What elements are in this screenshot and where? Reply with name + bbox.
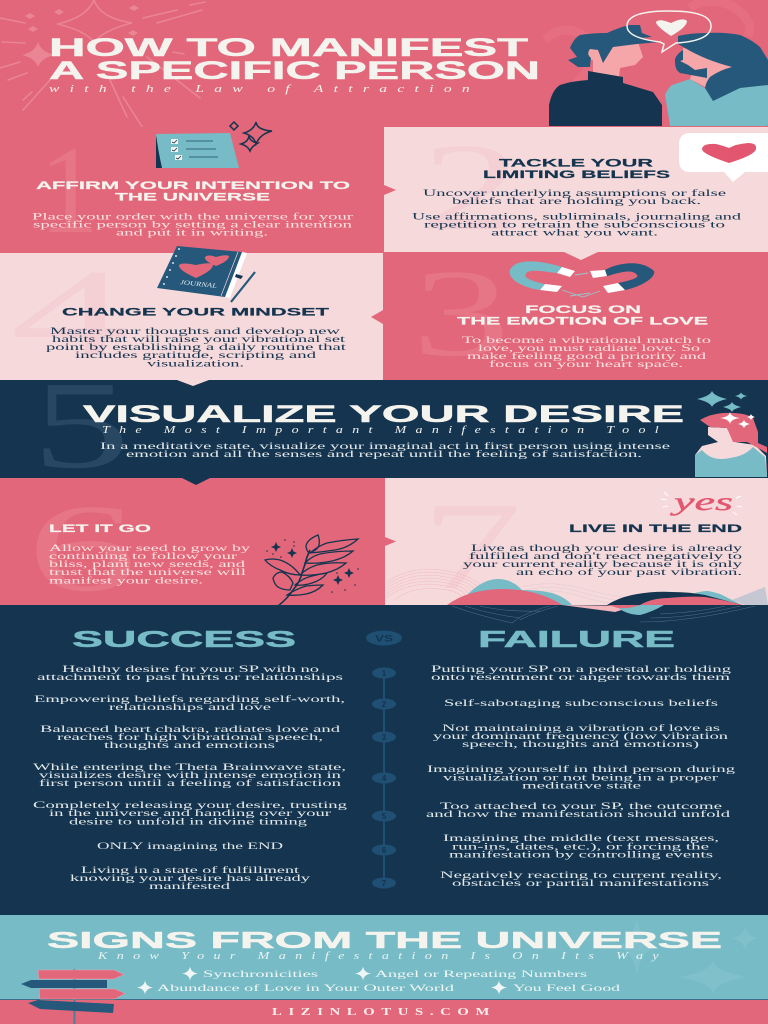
panel 2 — [384, 119, 768, 257]
success list: thoughts and emotions — [104, 740, 276, 750]
number 2: 2 — [421, 119, 521, 257]
body text — [463, 543, 743, 577]
vs badge: VS — [375, 634, 393, 644]
failure list — [426, 664, 736, 888]
timeline: 4 — [382, 774, 387, 783]
body text — [46, 326, 347, 368]
heading: SIGNS FROM THE UNIVERSE — [47, 927, 722, 953]
success list: Living in a state of fulfillment — [81, 865, 300, 875]
panel 7 — [385, 478, 768, 616]
timeline: 6 — [382, 846, 387, 855]
illustration: signpost — [21, 969, 125, 1024]
timeline: 1 — [382, 669, 387, 678]
signs list — [137, 966, 621, 994]
body text: an echo of your past vibration. — [516, 567, 742, 577]
heading: AFFIRM YOUR INTENTION TO — [36, 180, 351, 192]
body text — [32, 212, 353, 238]
icon: checklist — [156, 133, 239, 168]
success list: Healthy desire for your SP with no — [62, 664, 320, 674]
failure list: Imagining the middle (text messages, — [443, 833, 719, 843]
heading — [36, 180, 351, 204]
body text: focus on your heart space. — [489, 359, 683, 369]
heading: CHANGE YOUR MINDSET — [62, 306, 330, 318]
failure list: Not maintaining a vibration of love as — [442, 723, 721, 733]
success list: While entering the Theta Brainwave state, — [33, 762, 346, 772]
failure list: speech, thoughts and emotions) — [462, 739, 699, 749]
body text: In a meditative state, visualize your imaginal act in first person using intense — [100, 441, 670, 451]
body text: To become a vibrational match to — [462, 335, 712, 345]
number 1: 1 — [39, 122, 99, 260]
failure list: visualization or not being in a proper — [443, 772, 718, 782]
failure list: Too attached to your SP, the outcome — [440, 801, 722, 811]
number 5: 5 — [32, 357, 130, 495]
title: A SPECIFIC PERSON — [49, 57, 540, 85]
icon: sparkles — [230, 122, 272, 151]
body text: Place your order with the universe for your — [32, 212, 353, 222]
body text: visualization. — [147, 358, 244, 368]
title — [49, 34, 540, 85]
body text: Allow your seed to grow by — [49, 543, 251, 553]
heading: THE UNIVERSE — [115, 192, 270, 204]
title: HOW TO MANIFEST — [49, 34, 528, 62]
timeline: 2 — [382, 700, 387, 709]
panel 3 — [383, 245, 768, 383]
body text: beliefs that are holding you back. — [452, 196, 701, 206]
number 6: 6 — [27, 480, 137, 618]
footer — [0, 999, 768, 1024]
body text: Uncover underlying assumptions or false — [423, 188, 726, 198]
success list: desire to unfold in divine timing — [69, 816, 308, 826]
failure list: and how the manifestation should unfold — [426, 809, 731, 819]
body text: Use affirmations, subliminals, journaling and — [412, 212, 742, 222]
icon: leafy branch — [265, 535, 359, 606]
icon: magnets — [510, 261, 654, 297]
heading: LIVE IN THE END — [569, 523, 742, 535]
panel: signs from the universe — [0, 915, 768, 1000]
timeline: 5 — [382, 812, 387, 821]
heading: VISUALIZE YOUR DESIRE — [83, 401, 684, 428]
body text: point by establishing a daily routine that — [46, 342, 347, 352]
icon: yes: yes — [668, 489, 733, 516]
decorative faint stars — [618, 918, 758, 994]
body text: emotion and all the senses and repeat until the feeling of satisfaction. — [126, 449, 642, 459]
body text: bliss, plant new seeds, and — [49, 559, 246, 569]
panel: header — [0, 0, 768, 128]
body text: Master your thoughts and develop new — [50, 326, 341, 336]
failure list: run-ins, dates, etc.), or forcing the — [452, 842, 709, 852]
heading: FOCUS ON — [525, 304, 641, 316]
heading: LIMITING BELIEFS — [483, 169, 670, 181]
body text: fulfilled and don't react negatively to — [469, 551, 743, 561]
subheading: Know Your Manifestation Is On Its Way — [97, 951, 668, 962]
panel 5 — [0, 357, 768, 495]
body text: make feeling good a priority and — [467, 351, 707, 361]
number 3: 3 — [412, 245, 510, 383]
success list: manifested — [149, 881, 231, 891]
body text: trust that the universe will — [49, 567, 247, 577]
icon: heart speech bubble — [679, 133, 768, 182]
heading — [483, 158, 670, 181]
decorative sunburst — [0, 0, 205, 128]
failure list: Self-sabotaging subconscious beliefs — [444, 698, 719, 708]
body text: and put it in writing. — [116, 228, 268, 238]
success list: relationships and love — [109, 702, 271, 712]
success list: knowing your desire has already — [70, 873, 311, 883]
success list: first person until a feeling of satisfaction — [39, 778, 342, 788]
panel 1 — [0, 122, 384, 260]
heading: LET IT GO — [49, 523, 152, 535]
success list: ONLY imagining the END — [97, 841, 284, 851]
heading: failure: FAILURE — [478, 626, 675, 652]
failure list: onto resentment or anger towards them — [431, 672, 730, 682]
icon: yes — [661, 489, 742, 516]
arrow: step 1 to 2 — [384, 185, 396, 195]
panel: success vs failure — [0, 605, 768, 915]
success list: visualizes desire with intense emotion in — [39, 770, 342, 780]
panel 6 — [0, 478, 385, 618]
speech bubble — [627, 11, 711, 52]
heading: THE EMOTION OF LOVE — [457, 316, 708, 328]
arrow: step 5 to 6 — [182, 478, 210, 485]
body text: habits that will raise your vibrational set — [52, 334, 346, 344]
signs list: Synchronicities — [203, 969, 319, 979]
number 4: 4 — [10, 245, 130, 383]
timeline: 7 — [382, 879, 387, 888]
failure list: manifestation by controlling events — [449, 850, 714, 860]
heading — [457, 304, 708, 328]
faint heart background — [545, 1, 750, 85]
success list: Completely releasing your desire, trusting — [33, 800, 348, 810]
success list — [33, 664, 348, 891]
success list: Empowering beliefs regarding self-worth, — [34, 694, 345, 704]
failure list: Negatively reacting to current reality, — [440, 870, 722, 880]
signs list: Abundance of Love in Your Outer World — [157, 983, 455, 993]
success list: Balanced heart chakra, radiates love and — [40, 724, 341, 734]
icon: journal: JOURNAL — [180, 279, 218, 290]
arrow: step 6 to 7 — [385, 537, 396, 546]
timeline — [372, 668, 396, 888]
body text: attract what you want. — [491, 228, 658, 238]
body text: repetition to retrain the subconscious to — [424, 220, 726, 230]
failure list: your dominant frequency (low vibration — [433, 731, 729, 741]
arrow: step 4 to 5 — [177, 380, 209, 386]
man — [549, 25, 662, 126]
body text: continuing to follow your — [49, 551, 237, 561]
arrow: step 2 to 3 — [564, 252, 598, 260]
timeline: 3 — [382, 733, 387, 742]
illustration: waves — [387, 569, 768, 623]
body text — [462, 335, 712, 369]
arrow: step 3 to 4 — [371, 310, 383, 324]
footer: LIZINLOTUS.COM — [272, 1006, 496, 1018]
success list: in the universe and handing over your — [49, 808, 331, 818]
body text: your current reality because it is only — [463, 559, 743, 569]
signs list: Angel or Repeating Numbers — [375, 969, 588, 979]
panel 4 — [0, 245, 383, 383]
success list: reaches for high vibrational speech, — [57, 732, 323, 742]
failure list: obstacles or partial manifestations — [452, 878, 710, 888]
signs list: You Feel Good — [513, 983, 621, 993]
woman — [665, 33, 768, 126]
failure list: meditative state — [522, 780, 641, 790]
success list: attachment to past hurts or relationships — [37, 672, 344, 682]
subtitle: with the Law of Attraction — [49, 84, 480, 95]
illustration: couple — [549, 11, 768, 126]
body text — [49, 543, 251, 586]
body text: includes gratitude, scripting and — [75, 350, 317, 360]
number 7: 7 — [421, 478, 522, 616]
subheading: The Most Important Manifestation Tool — [102, 425, 668, 436]
icon: journal — [157, 246, 255, 302]
failure list: Imagining yourself in third person during — [427, 764, 736, 774]
body text: love, you must radiate love. So — [478, 343, 701, 353]
vs badge — [366, 630, 402, 646]
body text: Live as though your desire is already — [471, 543, 743, 553]
body text — [100, 441, 670, 459]
body text — [412, 188, 742, 238]
body text: specific person by setting a clear intention — [33, 220, 353, 230]
illustration: woman with stars — [695, 391, 767, 477]
failure list: Putting your SP on a pedestal or holding — [431, 664, 732, 674]
body text: manifest your desire. — [49, 576, 203, 586]
heading: TACKLE YOUR — [499, 158, 653, 170]
heading: success: SUCCESS — [72, 626, 296, 652]
